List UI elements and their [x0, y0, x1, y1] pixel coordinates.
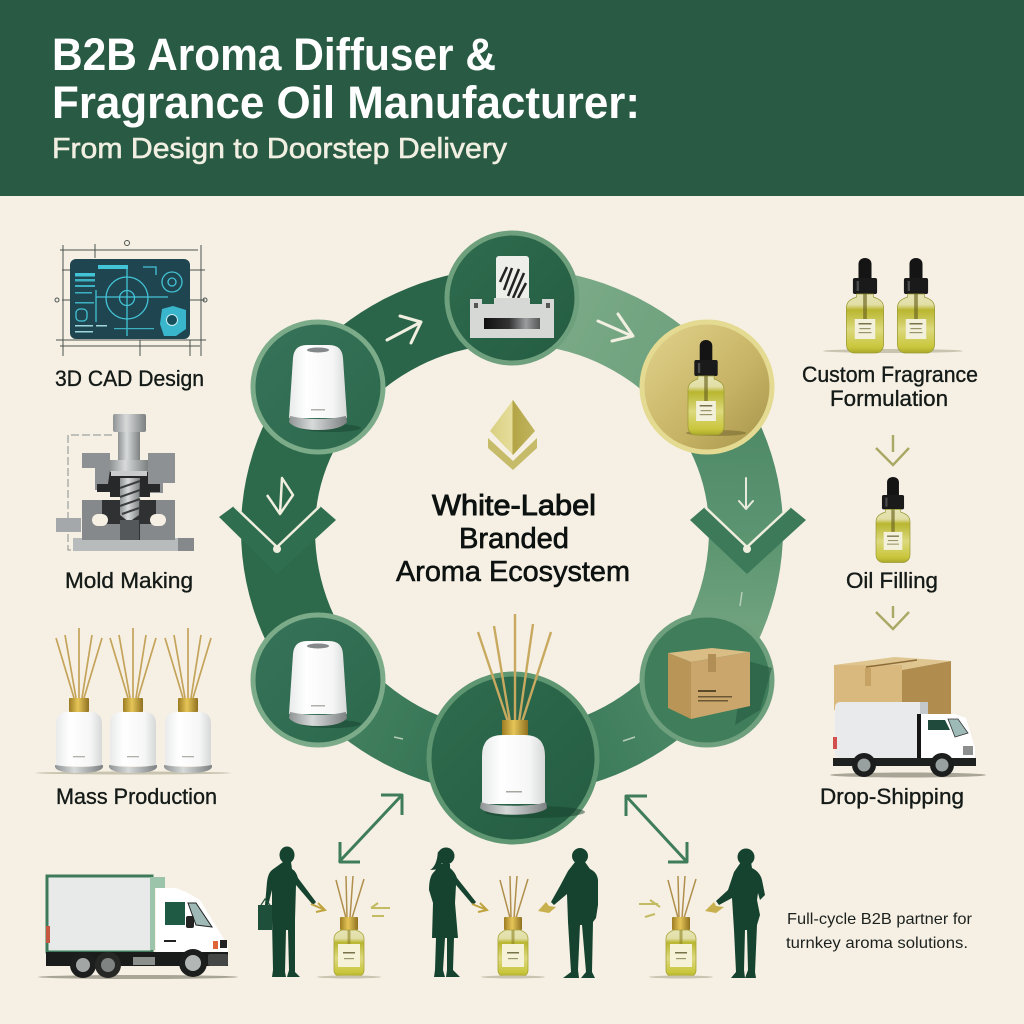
- arrow: top left: [387, 316, 421, 343]
- customer group 2: [429, 848, 545, 978]
- small dashes on ring: [394, 592, 742, 741]
- arrow: top right: [598, 314, 633, 341]
- reed bottle: [666, 876, 696, 977]
- center emblem: [488, 400, 537, 470]
- arrow: left: [267, 478, 293, 514]
- label: Custom Fragrance: [802, 362, 978, 387]
- center heading: White-Label: [432, 490, 596, 522]
- label: Mold Making: [65, 568, 193, 593]
- hand arrow: [472, 903, 487, 912]
- label: Mass Production: [56, 784, 217, 809]
- partner note: [786, 911, 973, 952]
- silhouette: man with bag: [265, 846, 316, 977]
- step: 3D CAD Design: [55, 240, 207, 391]
- arrow: filling to shipping: [876, 606, 909, 629]
- icon: dropper bottle: [876, 477, 910, 562]
- node: diffuser, upper left: [253, 322, 383, 452]
- center heading: [396, 490, 630, 588]
- delivery truck, bottom left: [38, 876, 238, 979]
- icon: mold cross-section: [56, 414, 194, 551]
- customer group 3: [538, 848, 713, 978]
- title: B2B Aroma Diffuser &: [52, 29, 496, 80]
- reed bottle: [334, 876, 364, 977]
- label: Oil Filling: [846, 568, 938, 593]
- arrow: right: [739, 478, 753, 509]
- icon: three reed diffusers: [35, 628, 231, 774]
- customer group 4: silhouette facing left: [705, 848, 765, 978]
- step: Drop-Shipping: [820, 657, 986, 809]
- node: mold, top: [447, 233, 577, 363]
- title: Fragrance Oil Manufacturer:: [52, 77, 640, 128]
- center heading: Aroma Ecosystem: [396, 556, 630, 588]
- silhouette: man facing left: [551, 848, 598, 978]
- hand arrow: [538, 902, 556, 913]
- reed bottle: [498, 876, 528, 977]
- chevron: left: [219, 506, 336, 574]
- label: Drop-Shipping: [820, 784, 964, 809]
- silhouette: woman: [429, 848, 476, 977]
- header banner: [0, 0, 1024, 196]
- label: 3D CAD Design: [55, 366, 204, 391]
- label: [802, 362, 978, 411]
- icon: carton and delivery van: [830, 657, 986, 778]
- double arrow: right: [626, 796, 687, 862]
- node: carton, lower right: [642, 615, 772, 745]
- step: Oil Filling: [846, 477, 938, 593]
- subtitle: From Design to Doorstep Delivery: [52, 133, 508, 165]
- customer group 1: [258, 846, 390, 978]
- step: Mold Making: [56, 414, 194, 593]
- node: diffuser, lower left: [253, 615, 383, 745]
- node: fragrance bottle, gold: [642, 322, 772, 452]
- title: [52, 29, 640, 128]
- node: reed diffuser, bottom hero: [429, 614, 597, 842]
- partner note: Full-cycle B2B partner for: [787, 911, 973, 928]
- double arrow: left: [339, 795, 402, 862]
- arrow: formulation to filling: [876, 435, 909, 465]
- hand and arrows: [311, 903, 390, 916]
- icon: two dropper bottles: [823, 258, 963, 353]
- hand: [705, 902, 724, 913]
- partner note: turnkey aroma solutions.: [786, 935, 968, 952]
- chevron: right: [690, 507, 806, 574]
- bag: [258, 899, 272, 930]
- process ring: [219, 296, 806, 764]
- icon: CAD blueprint: [55, 240, 207, 356]
- center heading: Branded: [459, 523, 569, 555]
- hand arrows near bottle: [639, 900, 660, 917]
- step: Custom Fragrance Formulation: [802, 258, 978, 411]
- label: Formulation: [830, 386, 948, 411]
- step: Mass Production: [35, 628, 231, 809]
